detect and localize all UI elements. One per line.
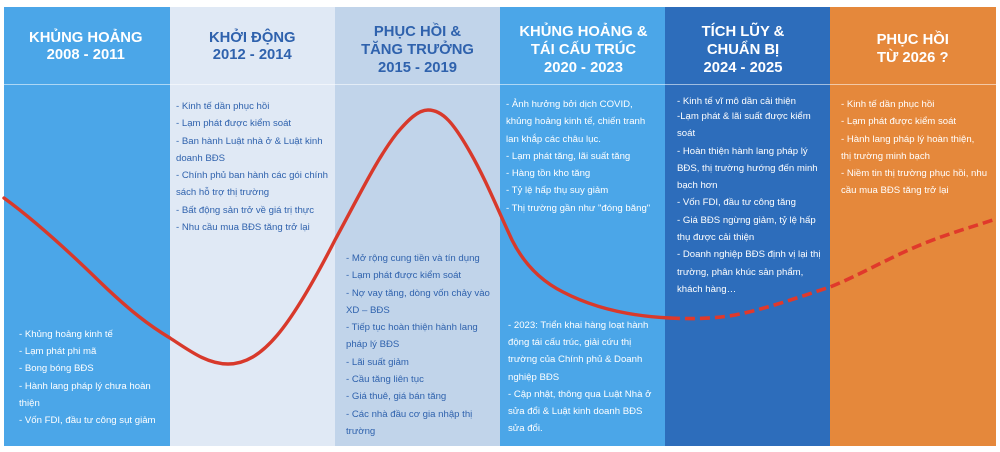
text block: 2023 restructuring bullets: động tái cấu trúc, giải cứu thị (508, 337, 631, 348)
heading: Phục hồi từ 2026 (830, 7, 996, 85)
text block: startup bullets: - Chính phủ ban hành các gói chính (176, 170, 328, 181)
text block: startup bullets: - Kinh tế dần phục hồi (176, 101, 269, 112)
text block: accumulation bullets: soát (677, 128, 695, 139)
text block: recovery bullets: - Tiếp tục hoàn thiện hành lang (346, 322, 478, 333)
panel: Tích lũy và chuẩn bị 2024-2025 (665, 7, 830, 446)
text block: 2026 recovery bullets: - Hành lang pháp lý hoàn thiện, (841, 134, 974, 145)
text block: covid bullets: - Tỷ lệ hấp thụ suy giảm (506, 185, 608, 196)
heading: Khởi động 2012-2014: KHỞI ĐỘNG (209, 30, 296, 46)
panel: Khủng hoảng và tái cấu trúc 2020-2023 (500, 7, 665, 446)
text block: crisis bullets (19, 329, 156, 426)
text block: recovery bullets: - Giá thuê, giá bán tăng (346, 391, 446, 402)
text block: crisis bullets: - Bong bóng BĐS (19, 363, 94, 374)
text block: crisis bullets: - Khủng hoảng kinh tế (19, 329, 113, 340)
text block: 2026 recovery bullets: - Lạm phát được kiểm soát (841, 116, 956, 127)
heading: Phục hồi và tăng trưởng 2015-2019: 2015 - 2019 (378, 60, 457, 76)
text block: recovery bullets: - Nợ vay tăng, dòng vốn chảy vào (346, 288, 490, 299)
heading: Khủng hoảng và tái cấu trúc 2020-2023: KHỦNG HOẢNG & (519, 24, 648, 40)
heading: Khởi động 2012-2014: 2012 - 2014 (213, 47, 292, 63)
panel: Khởi động 2012-2014 (170, 7, 335, 446)
text block: crisis bullets: - Hành lang pháp lý chưa hoàn (19, 381, 151, 392)
heading: Tích lũy và chuẩn bị 2024-2025 (665, 7, 830, 85)
text block: accumulation bullets: - Kinh tế vĩ mô dần cải thiện (677, 96, 796, 107)
heading: Khủng hoảng 2008-2011: 2008 - 2011 (47, 47, 125, 63)
text block: accumulation bullets (677, 96, 820, 295)
text block: crisis bullets: - Vốn FDI, đầu tư công sụt giảm (19, 415, 156, 426)
heading: Khủng hoảng và tái cấu trúc 2020-2023: TÁI CẤU TRÚC (531, 42, 636, 58)
heading: Khủng hoảng và tái cấu trúc 2020-2023 (500, 7, 665, 85)
text block: crisis bullets: - Lạm phát phi mã (19, 346, 96, 357)
heading: Tích lũy và chuẩn bị 2024-2025: TÍCH LŨY & (702, 24, 784, 40)
text block: accumulation bullets: - Doanh nghiệp BĐS định vị lại thị (677, 249, 820, 260)
text block: accumulation bullets: trường, phân khúc sản phẩm, (677, 267, 803, 278)
dashed forecast curve 2024-2026 (670, 219, 996, 319)
heading: Phục hồi từ 2026: PHỤC HỒI (877, 32, 949, 48)
text block: accumulation bullets: - Vốn FDI, đầu tư công tăng (677, 197, 796, 208)
text block: startup bullets: - Bất động sản trở về giá trị thực (176, 205, 314, 216)
text block: 2023 restructuring bullets: sửa đổi. (508, 423, 543, 434)
text block: 2026 recovery bullets: - Niềm tin thị trường phục hồi, nhu (841, 168, 987, 179)
text block: recovery bullets: - Cầu tăng liên tục (346, 374, 424, 385)
text block: recovery bullets: trường (346, 426, 375, 437)
text block: startup bullets (176, 101, 328, 233)
text block: accumulation bullets: khách hàng… (677, 284, 736, 295)
text block: startup bullets: - Ban hành Luật nhà ở & Luật kinh (176, 136, 323, 147)
text block: startup bullets: sách hỗ trợ thị trường (176, 187, 269, 198)
text block: accumulation bullets: BĐS, thị trường hướng đến minh (677, 163, 818, 174)
text block: 2023 restructuring bullets: trường của Chính phủ & Doanh (508, 354, 642, 365)
heading: Khủng hoảng 2008-2011: KHỦNG HOẢNG (29, 30, 142, 46)
text block: covid bullets: - Lạm phát tăng, lãi suất tăng (506, 151, 630, 162)
heading: Phục hồi và tăng trưởng 2015-2019: PHỤC HỒI & (374, 24, 461, 40)
solid curve 2008-2023 (4, 110, 670, 364)
text block: accumulation bullets: - Hoàn thiện hành lang pháp lý (677, 146, 808, 157)
text block: 2026 recovery bullets: cầu mua BĐS tăng trở lại (841, 185, 949, 196)
text block: recovery bullets: - Lãi suất giảm (346, 357, 409, 368)
text block: 2023 restructuring bullets: - Cập nhật, thông qua Luật Nhà ở (508, 389, 651, 400)
heading: Phục hồi và tăng trưởng 2015-2019 (335, 7, 500, 85)
text block: crisis bullets: thiện (19, 398, 40, 409)
text block: recovery bullets: - Lạm phát được kiểm soát (346, 270, 461, 281)
text block: covid bullets: - Hàng tồn kho tăng (506, 168, 590, 179)
text block: covid bullets: khủng hoảng kinh tế, chiến tranh (506, 116, 645, 127)
text block: recovery bullets: XD – BĐS (346, 305, 390, 316)
panel: Phục hồi từ 2026 (830, 7, 996, 446)
text block: startup bullets: - Nhu cầu mua BĐS tăng trở lại (176, 222, 310, 233)
text block: covid bullets: lan khắp các châu lục. (506, 134, 601, 145)
heading: Phục hồi từ 2026: TỪ 2026 ? (877, 50, 948, 66)
text block: 2023 restructuring bullets: - 2023: Triển khai hàng loạt hành (508, 320, 648, 331)
text block: covid bullets: - Thị trường gần như "đóng băng" (506, 203, 650, 214)
text block: recovery bullets: - Mở rộng cung tiền và tín dụng (346, 253, 480, 264)
text block: covid bullets: - Ảnh hưởng bởi dịch COVID, (506, 99, 633, 110)
text block: 2023 restructuring bullets: sửa đổi & Luật kinh doanh BĐS (508, 406, 642, 417)
text block: recovery bullets: - Các nhà đầu cơ gia nhập thị (346, 409, 472, 420)
text block: 2023 restructuring bullets: nghiệp BĐS (508, 372, 559, 383)
text block: 2023 restructuring bullets (508, 320, 652, 434)
text block: startup bullets: - Lạm phát được kiểm soát (176, 118, 291, 129)
panel: Phục hồi và tăng trưởng 2015-2019 (335, 7, 500, 446)
heading: Tích lũy và chuẩn bị 2024-2025: 2024 - 2025 (704, 60, 782, 76)
text block: 2026 recovery bullets: - Kinh tế dần phục hồi (841, 99, 934, 110)
text block: accumulation bullets: - Giá BĐS ngừng giảm, tỷ lệ hấp (677, 215, 816, 226)
text block: 2026 recovery bullets (841, 99, 987, 196)
text block: covid bullets (506, 98, 650, 214)
text block: accumulation bullets: -Lạm phát & lãi suất được kiểm (677, 111, 811, 122)
text block: accumulation bullets: thụ được cải thiện (677, 232, 754, 243)
heading: Phục hồi và tăng trưởng 2015-2019: TĂNG TRƯỞNG (361, 42, 474, 58)
panel: Khủng hoảng 2008-2011 (4, 7, 170, 446)
heading: Tích lũy và chuẩn bị 2024-2025: CHUẨN BỊ (707, 42, 779, 58)
text block: startup bullets: doanh BĐS (176, 153, 225, 164)
text block: accumulation bullets: bạch hơn (677, 180, 717, 191)
text block: 2026 recovery bullets: thị trường minh bạch (841, 151, 930, 162)
heading: Khủng hoảng và tái cấu trúc 2020-2023: 2020 - 2023 (544, 60, 623, 76)
heading: Khủng hoảng 2008-2011 (4, 7, 170, 85)
heading: Khởi động 2012-2014 (170, 7, 335, 85)
text block: recovery bullets (346, 253, 490, 437)
text block: recovery bullets: pháp lý BĐS (346, 339, 399, 350)
